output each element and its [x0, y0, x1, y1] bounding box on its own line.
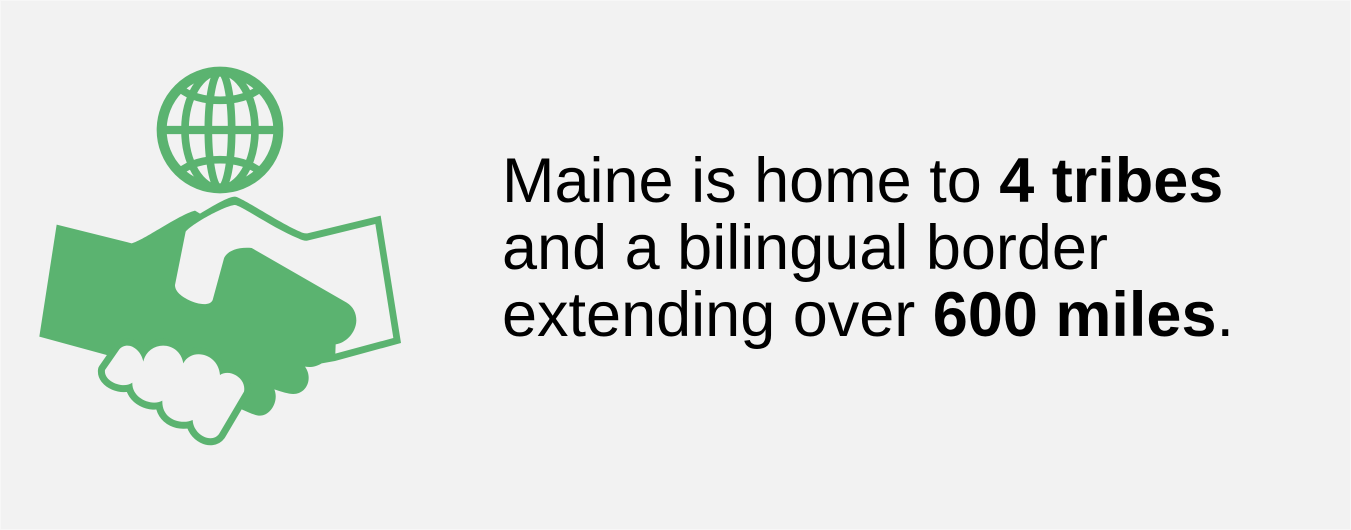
icon: outlined fist	[105, 346, 244, 438]
icon: globe	[160, 71, 280, 189]
icon: globe and handshake	[39, 66, 401, 446]
text block: Maine is home to 4 tribes	[502, 146, 1223, 216]
icon: handshake	[39, 197, 401, 438]
panel: background	[39, 66, 1228, 446]
text block	[502, 146, 1234, 350]
icon: solid green hand	[39, 197, 401, 416]
icon: open hand interior	[175, 205, 393, 354]
text block: extending over 600 miles.	[502, 280, 1234, 350]
text block: and a bilingual border	[502, 213, 1108, 283]
